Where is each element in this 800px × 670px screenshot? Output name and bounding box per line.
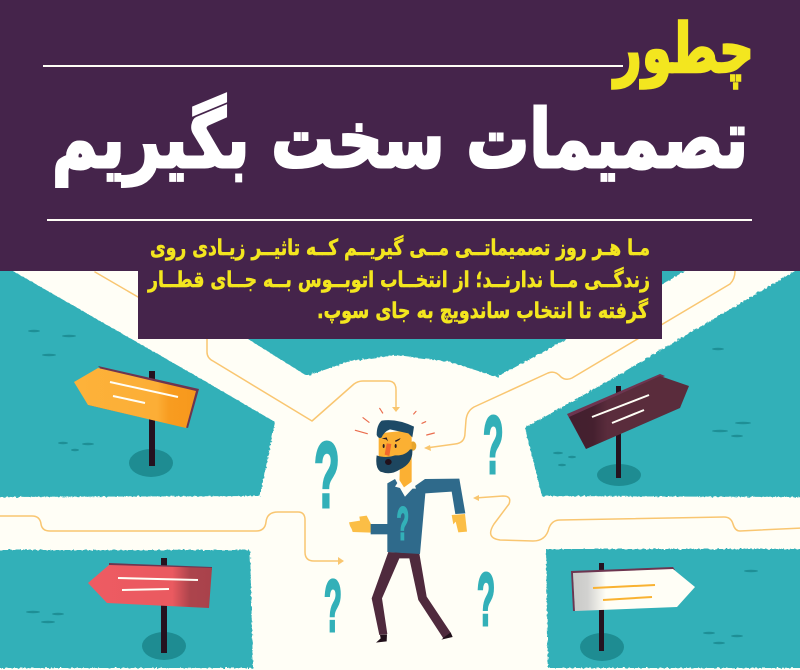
intro paragraph [147, 234, 650, 324]
neck [399, 460, 412, 489]
eyes and brows [382, 437, 401, 448]
right hand [452, 514, 467, 532]
question marks [314, 400, 504, 647]
intro line 1: مـا هـر روز تصمیماتــی مــی گیریــم کــه تاثیــر زیـادی روی [150, 234, 650, 261]
collar [395, 480, 416, 497]
beard [376, 449, 412, 473]
question mark: upper left: ? [314, 424, 340, 528]
arrow heads [338, 407, 479, 565]
intro line 3: گرفته تا انتخاب ساندویچ به جای سوپ. [317, 297, 648, 324]
left arm and hand [349, 516, 371, 533]
header panel [0, 0, 800, 271]
intro text panel [138, 271, 662, 339]
surprise ticks [355, 408, 434, 435]
rule under main title [47, 219, 752, 221]
sweater [387, 479, 465, 554]
path lines and arrows [0, 271, 800, 561]
hair [377, 420, 414, 438]
shirt question mark: ? [397, 498, 409, 550]
nose [385, 443, 391, 456]
sign: dark plum arrow, top right [567, 374, 689, 486]
question mark: lower right: ? [477, 558, 495, 641]
intro line 2: زندگــی مــا ندارنــد؛ از انتخــاب اتوبــوس بــه جــای قطــار [147, 266, 650, 293]
mouth [385, 459, 392, 465]
character: confused bearded man [349, 408, 467, 643]
sign: red arrow, bottom left [88, 558, 212, 660]
shoes [376, 632, 453, 643]
sign: orange arrow, top left [74, 366, 199, 477]
question mark: upper right: ? [483, 400, 504, 491]
sign: white arrow, bottom right [571, 563, 695, 661]
question mark: lower left: ? [324, 565, 342, 647]
face [379, 430, 412, 460]
ear [410, 441, 416, 451]
teal land parcels [0, 262, 800, 668]
rule under small title [43, 65, 623, 67]
grass ticks [26, 330, 758, 644]
trousers [372, 552, 451, 638]
